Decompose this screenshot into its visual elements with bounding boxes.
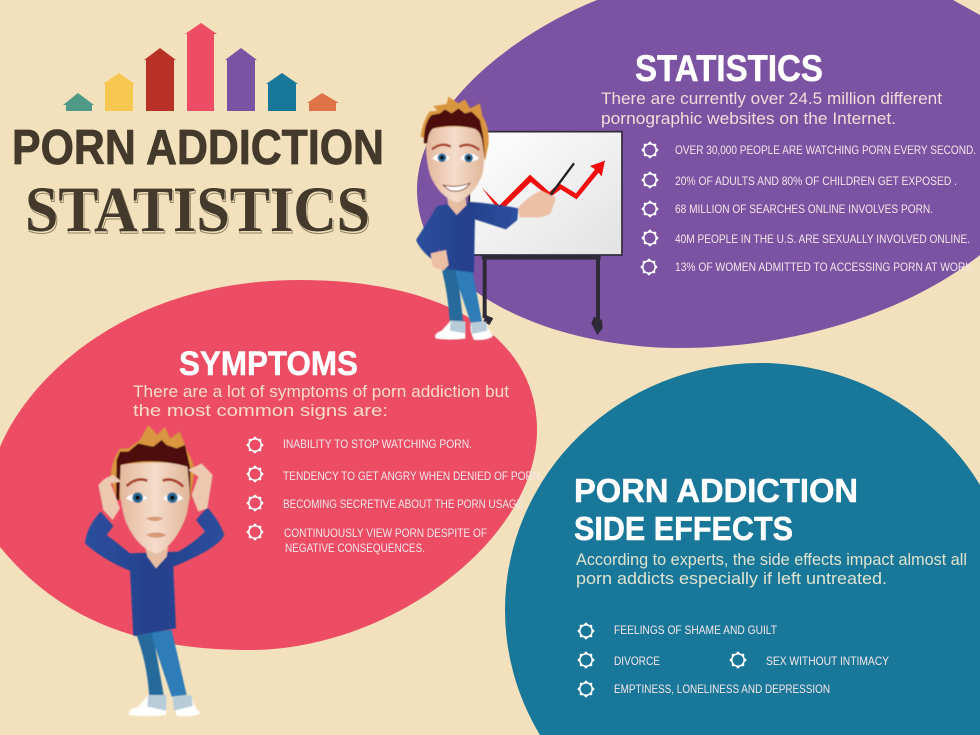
panel: statistics background (417, 0, 980, 348)
title: STATISTICS (26, 176, 371, 248)
text: side effects intro: porn addicts especially if left untreated. (576, 569, 887, 588)
shirt (85, 507, 224, 636)
character: presenter (416, 97, 556, 340)
text: symptoms intro: the most common signs are: (133, 401, 388, 420)
title (12, 121, 384, 248)
hair back (111, 425, 194, 500)
list: side effects: FEELINGS OF SHAME AND GUILT (614, 623, 778, 637)
brows (432, 145, 479, 150)
text: symptoms intro: There are a lot of symptoms of porn addiction but (133, 382, 509, 401)
hands (98, 463, 213, 520)
jeans (442, 268, 482, 324)
list: symptoms (246, 436, 543, 555)
list: symptoms: NEGATIVE CONSEQUENCES. (285, 541, 425, 555)
list: symptoms: INABILITY TO STOP WATCHING PORN. (283, 437, 472, 451)
nose and mouth (146, 517, 167, 538)
heading: symptoms: SYMPTOMS (179, 345, 358, 383)
text: symptoms intro (133, 382, 509, 420)
list: symptoms: TENDENCY TO GET ANGRY WHEN DENIED OF PORN. (283, 469, 543, 483)
hands (431, 191, 556, 271)
brows (127, 479, 183, 487)
shoes (435, 321, 493, 340)
heading: statistics: STATISTICS (635, 48, 823, 89)
list: statistics: 68 MILLION OF SEARCHES ONLINE INVOLVES PORN. (675, 202, 933, 216)
panel: side effects background (505, 363, 980, 735)
logo: house arrows (63, 23, 339, 111)
neck (145, 547, 168, 568)
icon: whiteboard with rising chart (469, 132, 622, 335)
heading: side effects: PORN ADDICTION (574, 472, 858, 509)
text: statistics intro: pornographic websites on the Internet. (601, 109, 896, 128)
character: worried man (85, 425, 224, 716)
list: side effects (577, 622, 889, 698)
heading: side effects (574, 472, 858, 547)
panel: symptoms background (0, 280, 537, 650)
eyes (432, 153, 479, 162)
list: side effects: DIVORCE (614, 654, 660, 668)
text: statistics intro: There are currently over 24.5 million different (601, 89, 942, 108)
face (119, 462, 190, 554)
title: PORN ADDICTION (12, 121, 384, 175)
list: side effects: SEX WITHOUT INTIMACY (766, 654, 889, 668)
list: statistics (640, 141, 976, 276)
text: statistics intro (601, 89, 942, 128)
text: side effects intro: According to experts, the side effects impact almost all (576, 550, 967, 569)
hair front (424, 108, 485, 160)
list: symptoms: BECOMING SECRETIVE ABOUT THE PORN USAGE. (283, 497, 526, 511)
eyes (126, 493, 183, 502)
shoes (129, 695, 201, 716)
hair back (421, 97, 489, 162)
list: symptoms: CONTINUOUSLY VIEW PORN DESPITE OF (284, 526, 487, 540)
text: side effects intro (576, 550, 967, 588)
face (426, 127, 484, 203)
hair front (116, 440, 191, 500)
neck (447, 195, 467, 215)
jeans (136, 630, 187, 697)
mouth (443, 183, 470, 191)
title: STATISTICS (25, 174, 370, 246)
list: side effects: EMPTINESS, LONELINESS AND DEPRESSION (614, 682, 830, 696)
shirt (416, 202, 518, 273)
heading: side effects: SIDE EFFECTS (574, 510, 793, 547)
